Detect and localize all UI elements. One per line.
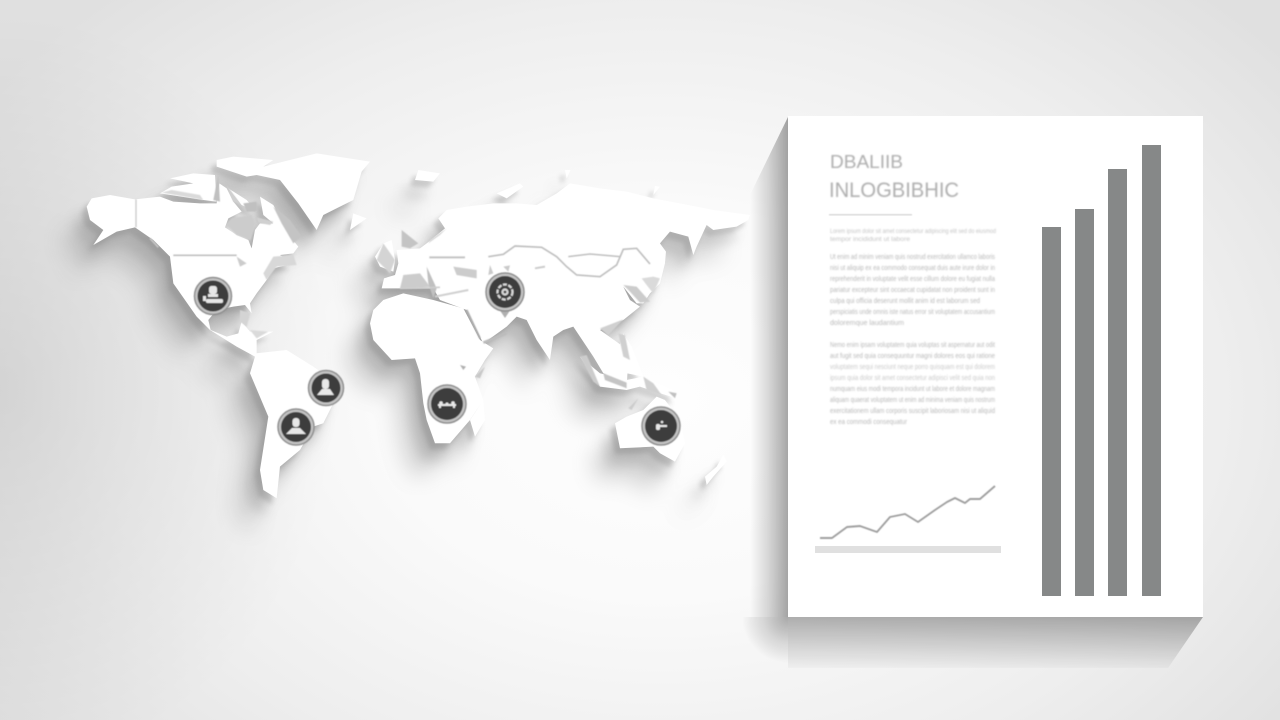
paragraph two: numquam eius modi tempora incidunt ut labore et dolore magnam	[830, 386, 995, 393]
paragraph one: perspiciatis unde omnis iste natus error sit voluptatem accusantium	[830, 309, 995, 316]
paragraph one: reprehenderit in voluptate velit esse cillum dolore eu fugiat nulla	[830, 276, 995, 283]
card heading	[829, 152, 959, 202]
world map	[63, 153, 750, 530]
paragraph one	[830, 254, 995, 327]
card shadow corner	[742, 617, 788, 663]
report card	[742, 116, 1203, 668]
icon: person	[286, 418, 306, 434]
heading rule	[829, 214, 912, 216]
paragraph two: exercitationem ullam corporis suscipit laboriosam nisi ut aliquid	[830, 408, 995, 415]
icon: person	[317, 379, 334, 395]
paragraph two: ex ea commodi consequatur	[830, 419, 908, 426]
paragraph two: aliquam quaerat voluptatem ut enim ad minima veniam quis nostrum	[830, 397, 995, 404]
intro text: Lorem ipsum dolor sit amet consectetur adipiscing elit sed do eiusmod	[830, 228, 996, 235]
chart baseline	[815, 546, 1001, 553]
paragraph two	[830, 342, 995, 426]
pin: asia	[486, 273, 524, 318]
paragraph one: Ut enim ad minim veniam quis nostrud exercitation ullamco laboris	[830, 254, 995, 261]
pin: argentina	[278, 409, 314, 445]
card heading: INLOGBIBHIC	[829, 179, 959, 202]
eurasia inland detail	[377, 228, 677, 410]
bar chart	[1042, 145, 1161, 596]
paragraph one: doloremque laudantium	[830, 320, 904, 327]
icon: figures	[656, 421, 667, 430]
pin: brazil	[308, 370, 344, 406]
paragraph two: aut fugit sed quia consequuntur magni dolores eos qui ratione	[830, 353, 995, 360]
intro text: tempor incididunt ut labore	[830, 236, 911, 243]
map near shadow	[82, 159, 745, 504]
pin: australia	[642, 407, 680, 445]
background left shading	[0, 0, 340, 720]
north america inland detail	[136, 175, 302, 338]
intro text	[830, 228, 996, 243]
paragraph two: Nemo enim ipsam voluptatem quia voluptas sit aspernatur aut odit	[830, 342, 995, 349]
paragraph two: voluptatem sequi nesciunt neque porro quisquam est qui dolorem	[830, 364, 995, 371]
icon: globe	[498, 284, 512, 300]
map land masses	[87, 153, 750, 498]
paragraph one: nisi ut aliquip ex ea commodo consequat duis aute irure dolor in	[830, 265, 995, 272]
paragraph one: pariatur excepteur sint occaecat cupidatat non proident sunt in	[830, 287, 995, 294]
paragraph two: ipsum quia dolor sit amet consectetur adipisci velit sed quia non	[830, 375, 995, 382]
card shadow left	[750, 117, 788, 617]
icon: figures	[438, 401, 456, 408]
card sheet	[788, 116, 1203, 617]
icon: group	[203, 286, 223, 303]
map mid shadow	[75, 170, 738, 515]
pin: southern africa	[428, 385, 466, 423]
card shadow bottom	[788, 617, 1203, 668]
card heading: DBALIIB	[830, 152, 903, 172]
paragraph one: culpa qui officia deserunt mollit anim id est laborum sed	[830, 298, 980, 305]
pin: north america	[194, 278, 232, 314]
line chart	[815, 486, 1001, 553]
map far shadow	[63, 185, 726, 530]
